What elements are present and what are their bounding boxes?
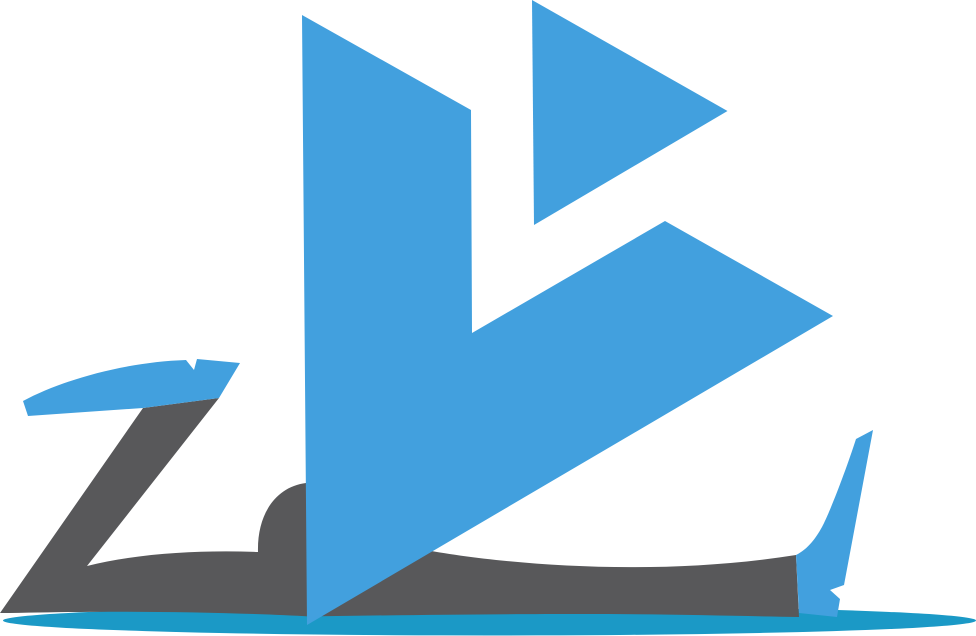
large blue play shape [302, 15, 833, 625]
small blue play triangle [532, 0, 728, 225]
reclining figure body [0, 398, 799, 617]
ground shadow ellipse [3, 606, 976, 636]
raised hand / sleeve [23, 359, 240, 416]
raised foot [796, 430, 873, 617]
